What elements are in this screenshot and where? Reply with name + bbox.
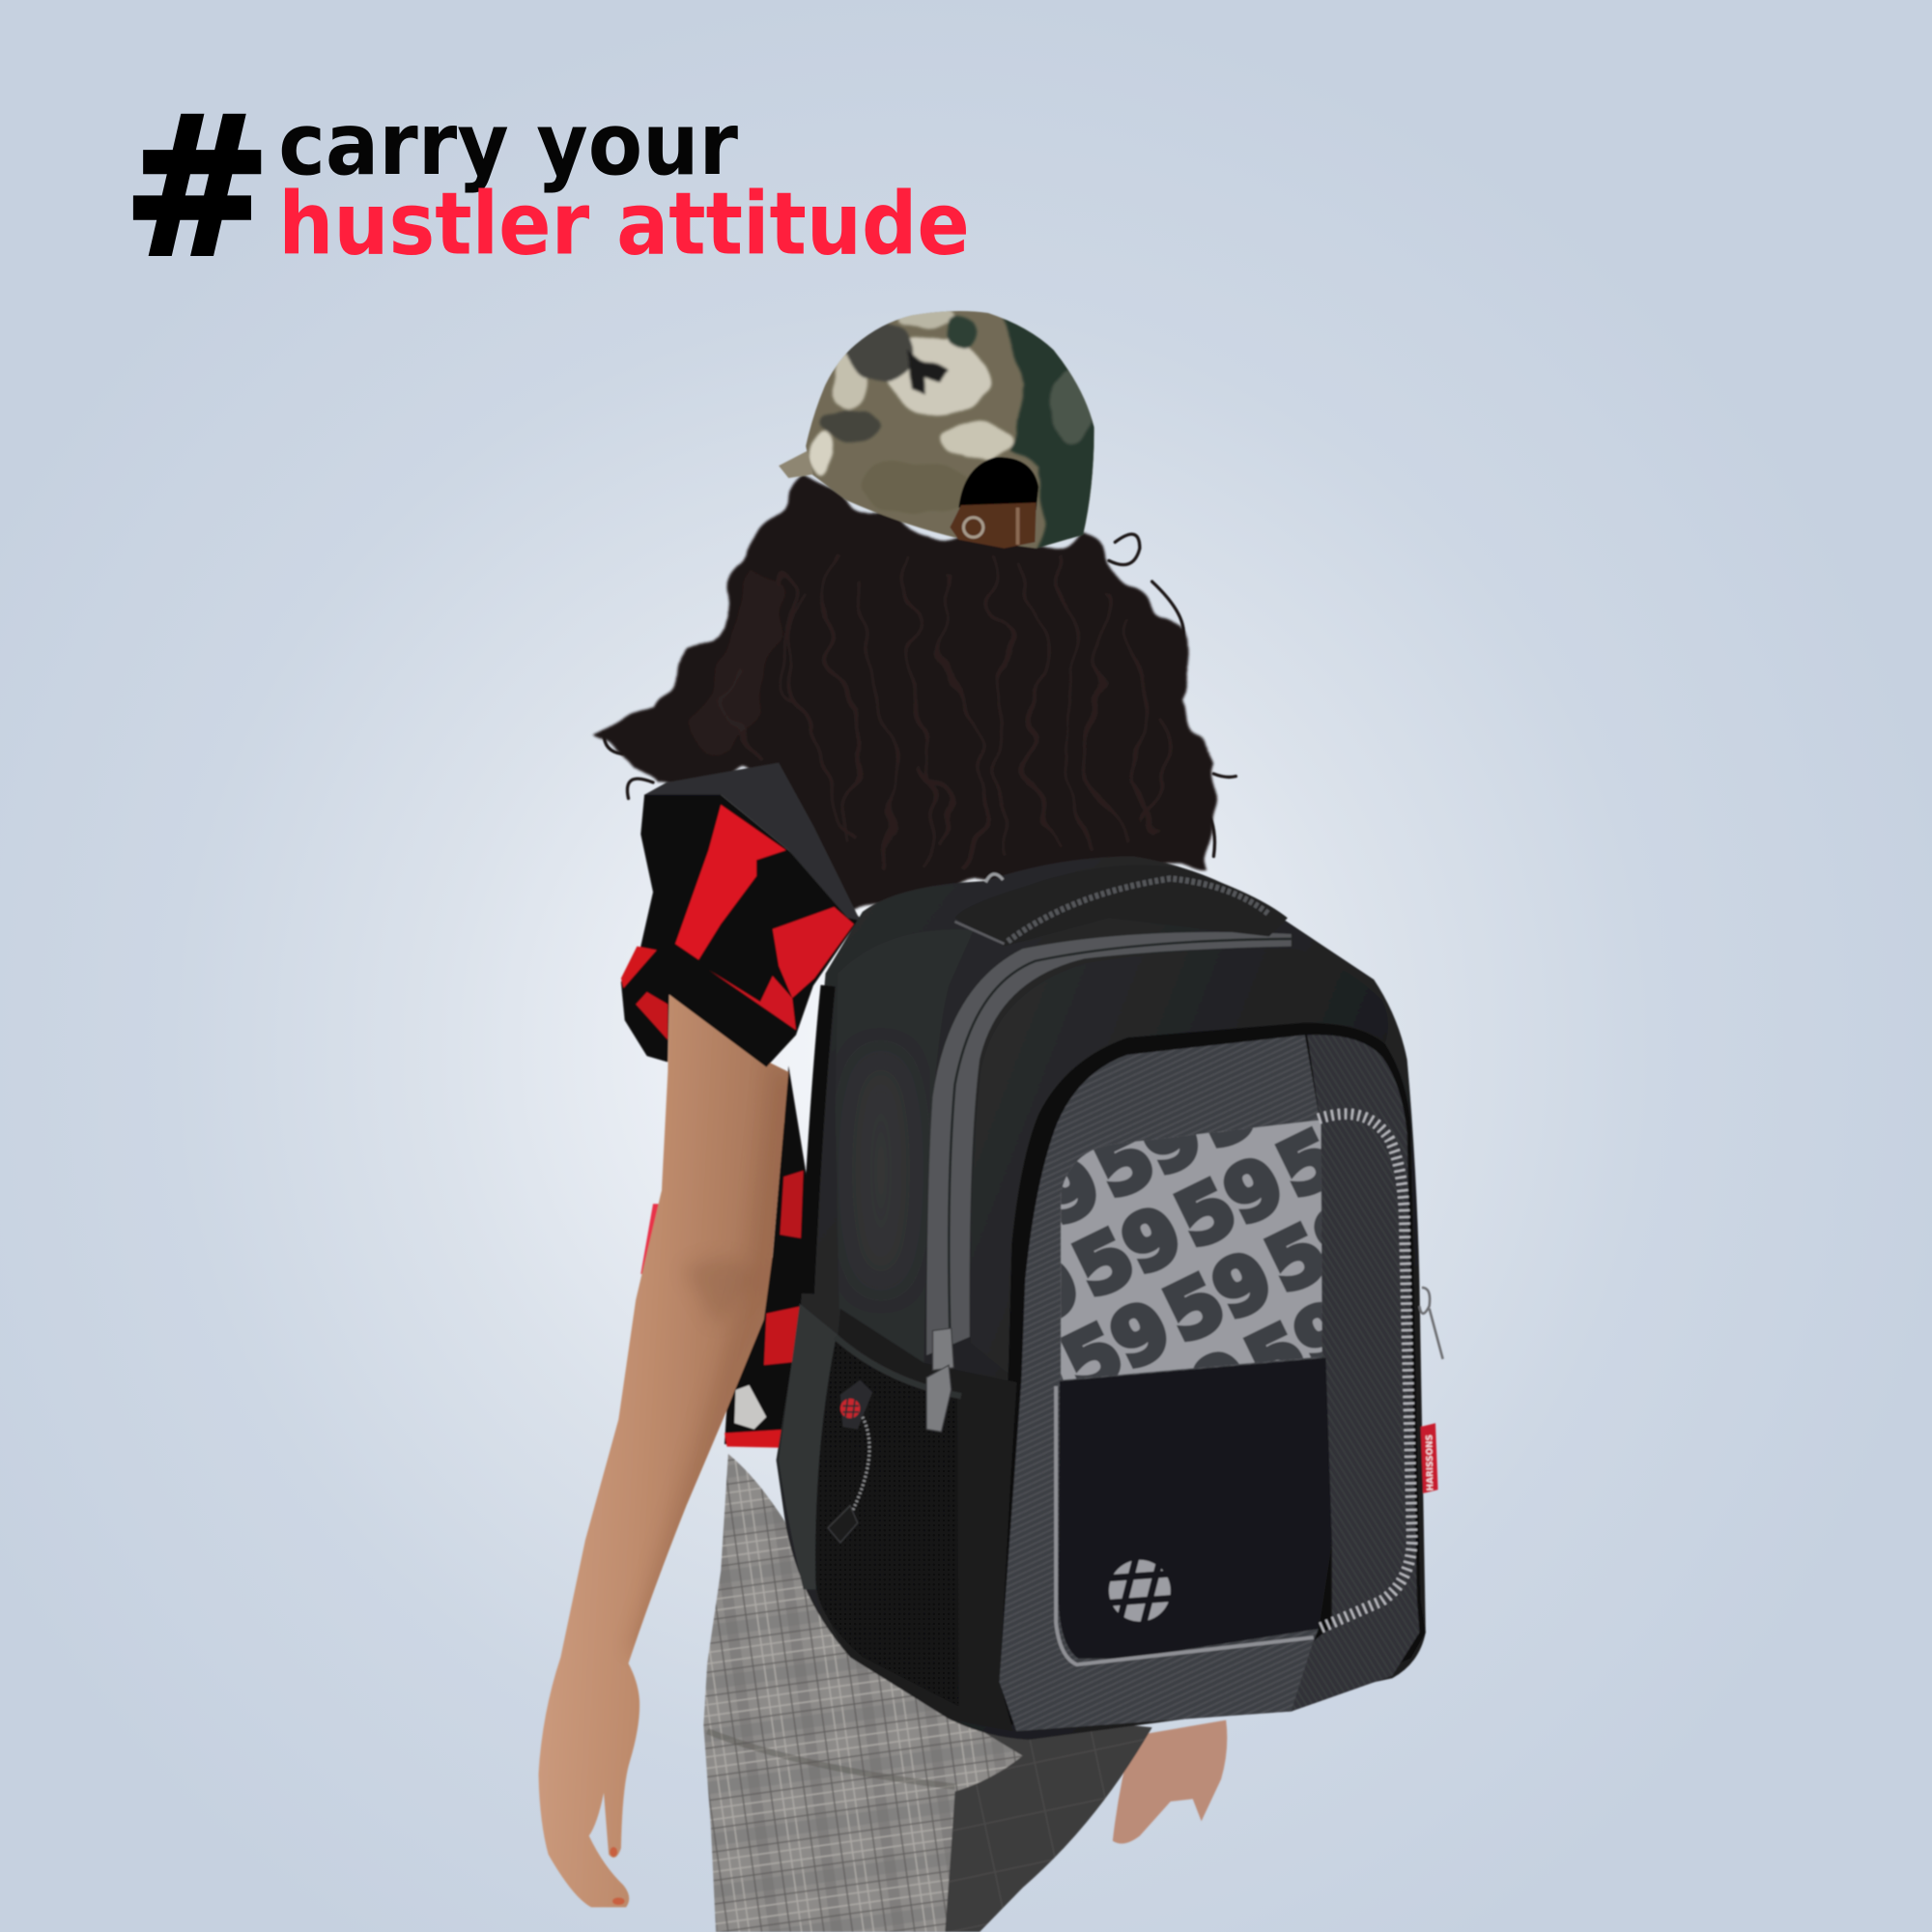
far hand bbox=[1113, 1720, 1227, 1843]
elbow shading bbox=[689, 1260, 746, 1316]
backpack: 59 print panel: 59 bbox=[1335, 1234, 1469, 1360]
backpack: key ring bbox=[985, 874, 1003, 882]
arm shading bbox=[632, 1064, 789, 1645]
backpack: 59 print panel: 59 bbox=[1233, 1283, 1368, 1409]
backpack: 59 print panel: 59 bbox=[1195, 946, 1329, 1072]
near arm and hand bbox=[538, 994, 788, 1907]
backpack: side zipper bbox=[807, 985, 828, 1293]
backpack: 59 print panel: 59 bbox=[1222, 1378, 1356, 1504]
backpack: 59 print panel: 59 bbox=[948, 1333, 1082, 1460]
backpack: 59 print panel: 59 bbox=[877, 1189, 1012, 1316]
heading line two: hustler attitude bbox=[278, 175, 970, 275]
shirt: shoulder and sleeve bbox=[621, 795, 860, 1067]
backpack: red brand label bbox=[1421, 1423, 1438, 1493]
backpack: front logo badge bbox=[1106, 1557, 1173, 1624]
backpack: front pocket piping bbox=[999, 1023, 1426, 1725]
backpack: red brand label: HARISSONS bbox=[1425, 1435, 1435, 1491]
shirt: lower body behind arm bbox=[640, 1065, 815, 1448]
hair: brown lit lock bbox=[689, 567, 786, 752]
backpack: 59 print panel: 59 bbox=[1163, 1139, 1297, 1265]
hair: main mass bbox=[603, 474, 1218, 918]
backpack: side zip puller bbox=[1419, 1288, 1443, 1359]
backpack: 59 print panel: 59 bbox=[1253, 1184, 1388, 1311]
trousers: far leg bbox=[899, 1700, 1152, 1932]
backpack: 59 print panel: 59 bbox=[1151, 1234, 1286, 1360]
backpack: 59 print panel: 59 bbox=[1081, 1090, 1216, 1216]
backpack: 59 print panel: 59 bbox=[1131, 1333, 1265, 1460]
backpack: mesh side pocket bbox=[815, 1341, 958, 1707]
backpack: side panel bbox=[836, 929, 974, 1363]
backpack: 59 print panel bbox=[1060, 1120, 1323, 1381]
backpack: 59 print panel: 59 bbox=[1018, 1477, 1152, 1604]
backpack: 59 print panel: 59 bbox=[889, 1094, 1023, 1221]
backpack shoulder strap bbox=[644, 763, 860, 921]
backpack: side panel highlight bbox=[877, 1125, 885, 1215]
backpack: 59 print panel: 59 bbox=[1296, 895, 1431, 1022]
title block bbox=[124, 75, 970, 299]
backpack: 59 print panel: 59 bbox=[980, 1140, 1114, 1265]
backpack: 59 print panel: 59 bbox=[1323, 1328, 1458, 1455]
backpack: back padding bbox=[779, 1303, 840, 1589]
backpack: 59 print panel: 59 bbox=[1050, 1284, 1184, 1409]
backpack: lower side section bbox=[815, 1309, 1016, 1731]
cap: leather strap with buckle bbox=[950, 502, 1037, 549]
backpack: 59 print panel: 59 bbox=[1061, 1189, 1196, 1315]
fingernails bbox=[610, 1847, 625, 1905]
cap: back opening bbox=[958, 457, 1038, 510]
backpack bbox=[777, 856, 1606, 1740]
cap: peak tip bbox=[779, 451, 813, 478]
trousers: near leg bbox=[703, 1454, 1023, 1932]
backpack: 59 print panel: 59 bbox=[1367, 1039, 1501, 1166]
backpack: carry handle bbox=[955, 866, 1288, 947]
backpack: black lower pocket bbox=[1059, 1358, 1332, 1659]
backpack: main zipper pull bbox=[926, 1328, 953, 1432]
backpack: body silhouette bbox=[777, 856, 1426, 1740]
backpack: 59 print panel: 59 bbox=[1264, 1090, 1400, 1216]
hair: highlight strands bbox=[729, 554, 1168, 863]
backpack: 59 print panel: 59 bbox=[1285, 990, 1419, 1117]
backpack: top front panel bbox=[971, 949, 1388, 1380]
backpack: mesh pocket binding bbox=[836, 1337, 961, 1396]
backpack: bead cord and toggle bbox=[828, 1417, 869, 1543]
figure: woman wearing the backpack, seen from behind bbox=[537, 310, 1445, 1932]
backpack: front pocket left and lower stripes bbox=[999, 1035, 1332, 1731]
cap bbox=[779, 308, 1103, 554]
backpack: 59 print panel: 59 bbox=[1093, 995, 1227, 1122]
trouser fold shadow bbox=[707, 1731, 955, 1786]
backpack: 59 print panel: 59 bbox=[1030, 1382, 1164, 1509]
hair: loose curls bbox=[604, 524, 1236, 856]
backpack: dashed reflective trim bbox=[1319, 1114, 1412, 1629]
backpack: front pocket right stripes bbox=[1292, 1035, 1419, 1712]
backpack: pocket piping line bbox=[1056, 1386, 1314, 1664]
hashtag symbol: # bbox=[124, 75, 271, 299]
backpack: 59 print panel: 59 bbox=[991, 1045, 1125, 1171]
heading line one: carry your bbox=[278, 95, 738, 195]
backpack: 59 print panel: 59 bbox=[1355, 1134, 1490, 1261]
backpack: 59 print panel: 59 bbox=[959, 1238, 1094, 1365]
arm right edge shading bbox=[632, 1064, 789, 1645]
backpack: gray zipper band bbox=[926, 932, 1292, 1355]
backpack: side tag with red mark bbox=[840, 1380, 872, 1430]
cap: camouflage patches bbox=[813, 308, 1103, 554]
backpack: 59 print panel: 59 bbox=[1183, 1040, 1318, 1167]
backpack: 59 print panel: 59 bbox=[1436, 1183, 1572, 1310]
backpack: 59 print panel: 59 bbox=[1120, 1428, 1254, 1554]
backpack: 59 print panel: 59 bbox=[1426, 1278, 1560, 1405]
